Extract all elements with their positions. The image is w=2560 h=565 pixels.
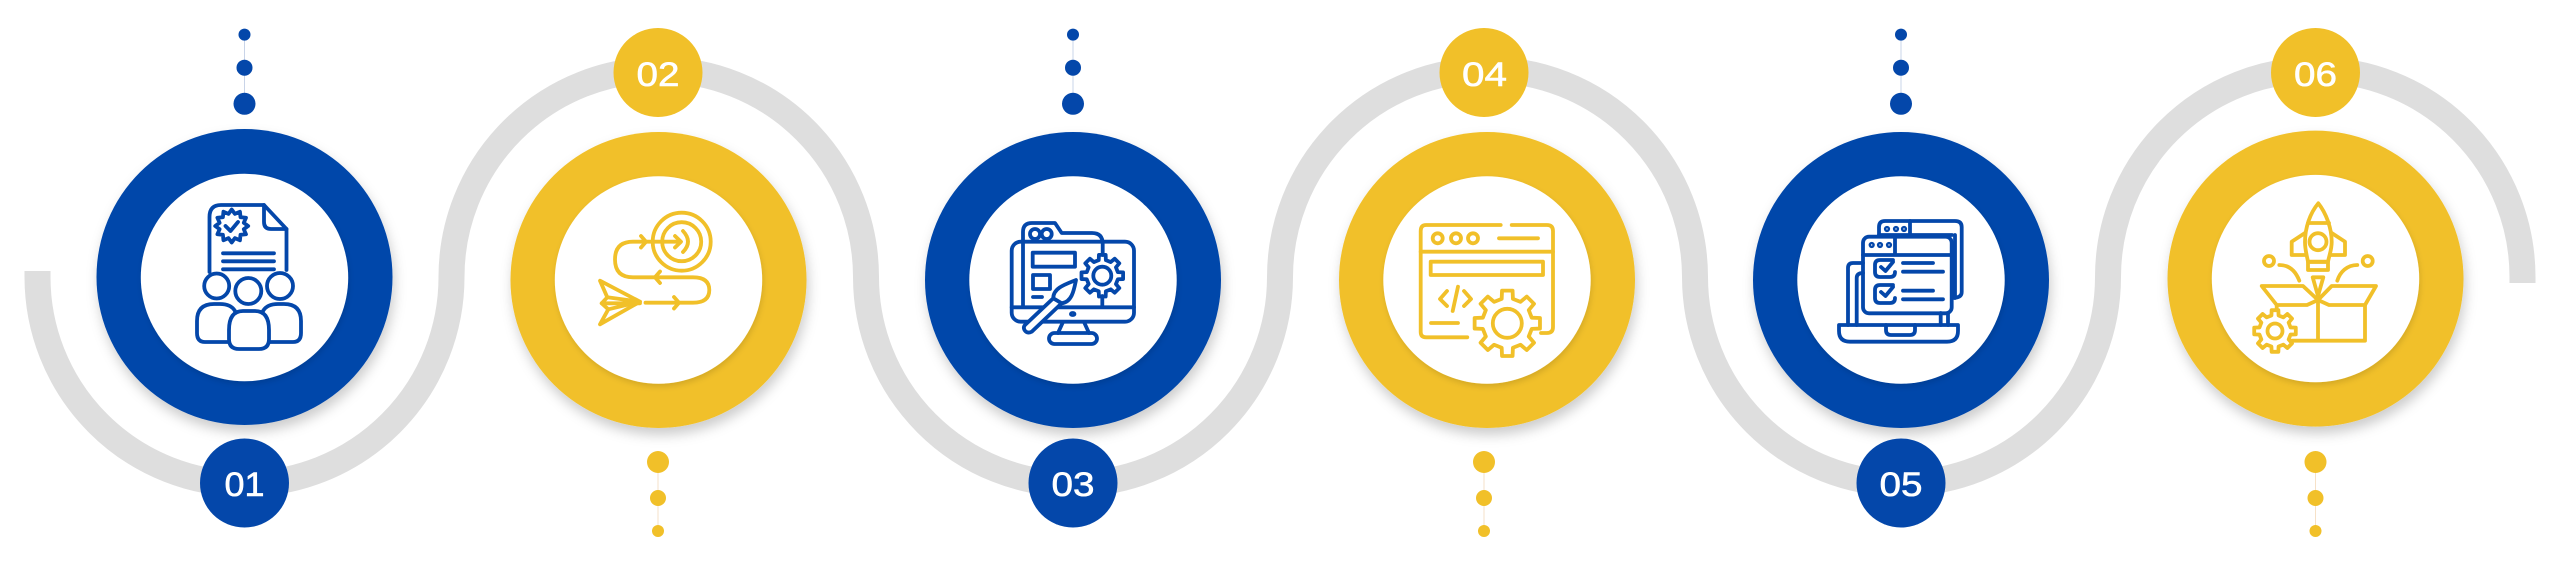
- badge 04: 04: [1462, 56, 1507, 94]
- dots above ring 3: [1062, 29, 1084, 115]
- ring 5: [1753, 132, 2049, 428]
- icon: browser window with code and gear: [1421, 225, 1553, 356]
- step 06: [2168, 28, 2464, 537]
- icon: certificate and team: [197, 205, 301, 349]
- dots above ring 1: [234, 29, 256, 115]
- ring 4: [1339, 132, 1635, 428]
- badge 06: [2271, 28, 2360, 117]
- icon: monitor with design tools: [1012, 223, 1134, 344]
- badge 03: [1028, 438, 1118, 528]
- grey winding path: [38, 70, 2522, 484]
- step 03: [925, 29, 1221, 527]
- dots below ring 6: [2304, 451, 2326, 537]
- ring 1: [96, 129, 392, 425]
- icon: rocket launching from box with gear: [2254, 203, 2376, 352]
- step 04: [1339, 28, 1635, 537]
- ring 2: [510, 132, 806, 428]
- badge 02: [614, 28, 702, 117]
- dots below ring 4: [1473, 451, 1495, 537]
- step 05: [1753, 29, 2049, 527]
- badge 02: 02: [636, 56, 680, 94]
- ring 6: [2168, 131, 2464, 427]
- badge 01: 01: [224, 466, 264, 504]
- step 02: [510, 28, 806, 537]
- ring 3: [925, 132, 1221, 428]
- dots below ring 2: [647, 451, 669, 537]
- icon: target and paper plane route: [600, 213, 711, 324]
- badge 01: [200, 438, 289, 528]
- badge 04: [1440, 28, 1528, 117]
- badge 05: 05: [1880, 466, 1922, 504]
- badge 06: 06: [2294, 56, 2337, 94]
- icon: laptop with checklist windows: [1839, 221, 1962, 342]
- badge 05: [1856, 438, 1946, 528]
- dots above ring 5: [1890, 29, 1912, 115]
- badge 03: 03: [1052, 466, 1094, 504]
- step 01: [96, 29, 392, 527]
